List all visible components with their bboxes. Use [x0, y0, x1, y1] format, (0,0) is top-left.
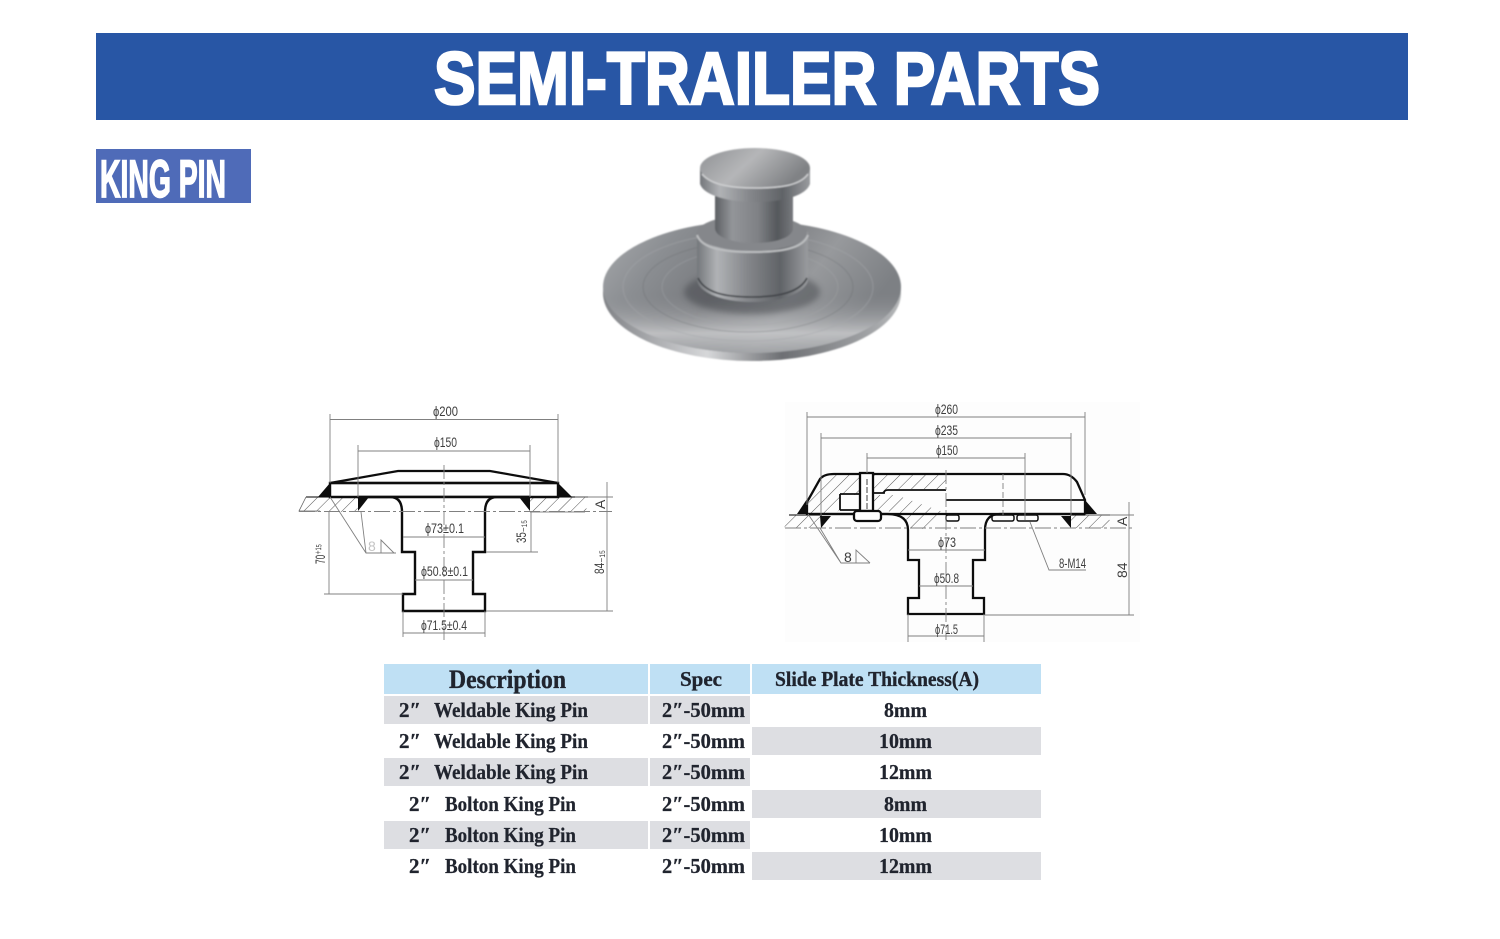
plate section hatching, bolton	[807, 474, 946, 530]
dimension labels, bolton: 8-M14	[1059, 555, 1086, 571]
table header row: Slide Plate Thickness(A)	[775, 667, 979, 691]
dimension labels, weldable: 84₋₁₅	[591, 550, 607, 574]
row 3: 2″	[399, 760, 421, 784]
table header row	[384, 664, 1041, 694]
row 4: 2″	[409, 792, 431, 816]
dimension labels, weldable: 8	[368, 538, 376, 554]
row 3: 12mm	[879, 760, 932, 784]
dimension labels, weldable: 35₋₁₅	[513, 520, 529, 543]
title banner	[96, 33, 1408, 120]
row 4	[409, 790, 1041, 818]
dimension labels, bolton: ϕ235	[935, 422, 958, 438]
dimension labels, bolton	[844, 401, 1130, 637]
row 2	[399, 727, 1041, 755]
row 2: 2″	[399, 729, 421, 753]
row 2: Weldable King Pin	[434, 729, 588, 753]
dimension labels, weldable: ϕ71.5±0.4	[421, 617, 467, 633]
product photo: king pin	[603, 148, 901, 361]
welds, weldable	[318, 483, 572, 511]
row 6: 2″-50mm	[662, 854, 745, 878]
table header row: Description	[449, 665, 566, 694]
section label: king pin: KING PIN	[100, 150, 226, 209]
row 5: Bolton King Pin	[445, 823, 576, 847]
row 6: Bolton King Pin	[445, 854, 576, 878]
row 3	[384, 758, 932, 786]
dimension labels, bolton: ϕ73	[938, 534, 956, 550]
row 5: 2″-50mm	[662, 823, 745, 847]
technical drawing: weldable king pin	[299, 403, 613, 640]
dimension labels, weldable: 70⁺¹⁵	[312, 544, 328, 564]
dimension lines, weldable	[299, 414, 613, 640]
dimension labels, weldable: ϕ73±0.1	[425, 520, 464, 536]
row 3: Weldable King Pin	[434, 760, 588, 784]
row 3: 2″-50mm	[662, 760, 745, 784]
row 2: 10mm	[879, 729, 932, 753]
dimension lines, bolton	[785, 412, 1135, 642]
row 1: 2″-50mm	[662, 698, 745, 722]
row 6: 12mm	[879, 854, 932, 878]
table header row: Spec	[680, 667, 722, 691]
row 5: 10mm	[879, 823, 932, 847]
row 1: 8mm	[884, 698, 927, 722]
section label: king pin	[96, 149, 251, 209]
row 1	[384, 696, 927, 724]
dimension labels, bolton: 84	[1114, 562, 1130, 578]
welds, bolton	[797, 499, 1097, 528]
row 1: Weldable King Pin	[434, 698, 588, 722]
dimension labels, weldable	[312, 403, 608, 633]
pin outline, weldable	[330, 471, 558, 611]
row 4: 2″-50mm	[662, 792, 745, 816]
row 4: Bolton King Pin	[445, 792, 576, 816]
dimension labels, bolton: ϕ71.5	[935, 621, 958, 637]
row 5	[384, 821, 932, 849]
specification table	[384, 664, 1041, 880]
dimension labels, bolton: ϕ150	[936, 442, 958, 458]
row 6	[409, 852, 1041, 880]
pin outline, bolton	[807, 473, 1085, 614]
row 2: 2″-50mm	[662, 729, 745, 753]
scanned paper tint	[785, 402, 1140, 642]
dimension labels, bolton: A	[1114, 516, 1130, 526]
technical drawing: bolton king pin	[784, 401, 1140, 642]
dimension labels, weldable: A	[592, 499, 608, 509]
dimension labels, bolton: 8	[844, 549, 852, 565]
row 1: 2″	[399, 698, 421, 722]
row 6: 2″	[409, 854, 431, 878]
dimension labels, bolton: ϕ50.8	[934, 570, 959, 586]
dimension labels, weldable: ϕ200	[433, 403, 458, 419]
dimension labels, weldable: ϕ50.8±0.1	[421, 563, 468, 579]
dimension labels, bolton: ϕ260	[935, 401, 958, 417]
slide plate section, bolton	[784, 515, 1112, 528]
row 4: 8mm	[884, 792, 927, 816]
dimension labels, weldable: ϕ150	[434, 434, 457, 450]
row 5: 2″	[409, 823, 431, 847]
slide plate section, weldable	[299, 497, 588, 512]
title banner: SEMI-TRAILER PARTS	[434, 37, 1100, 120]
